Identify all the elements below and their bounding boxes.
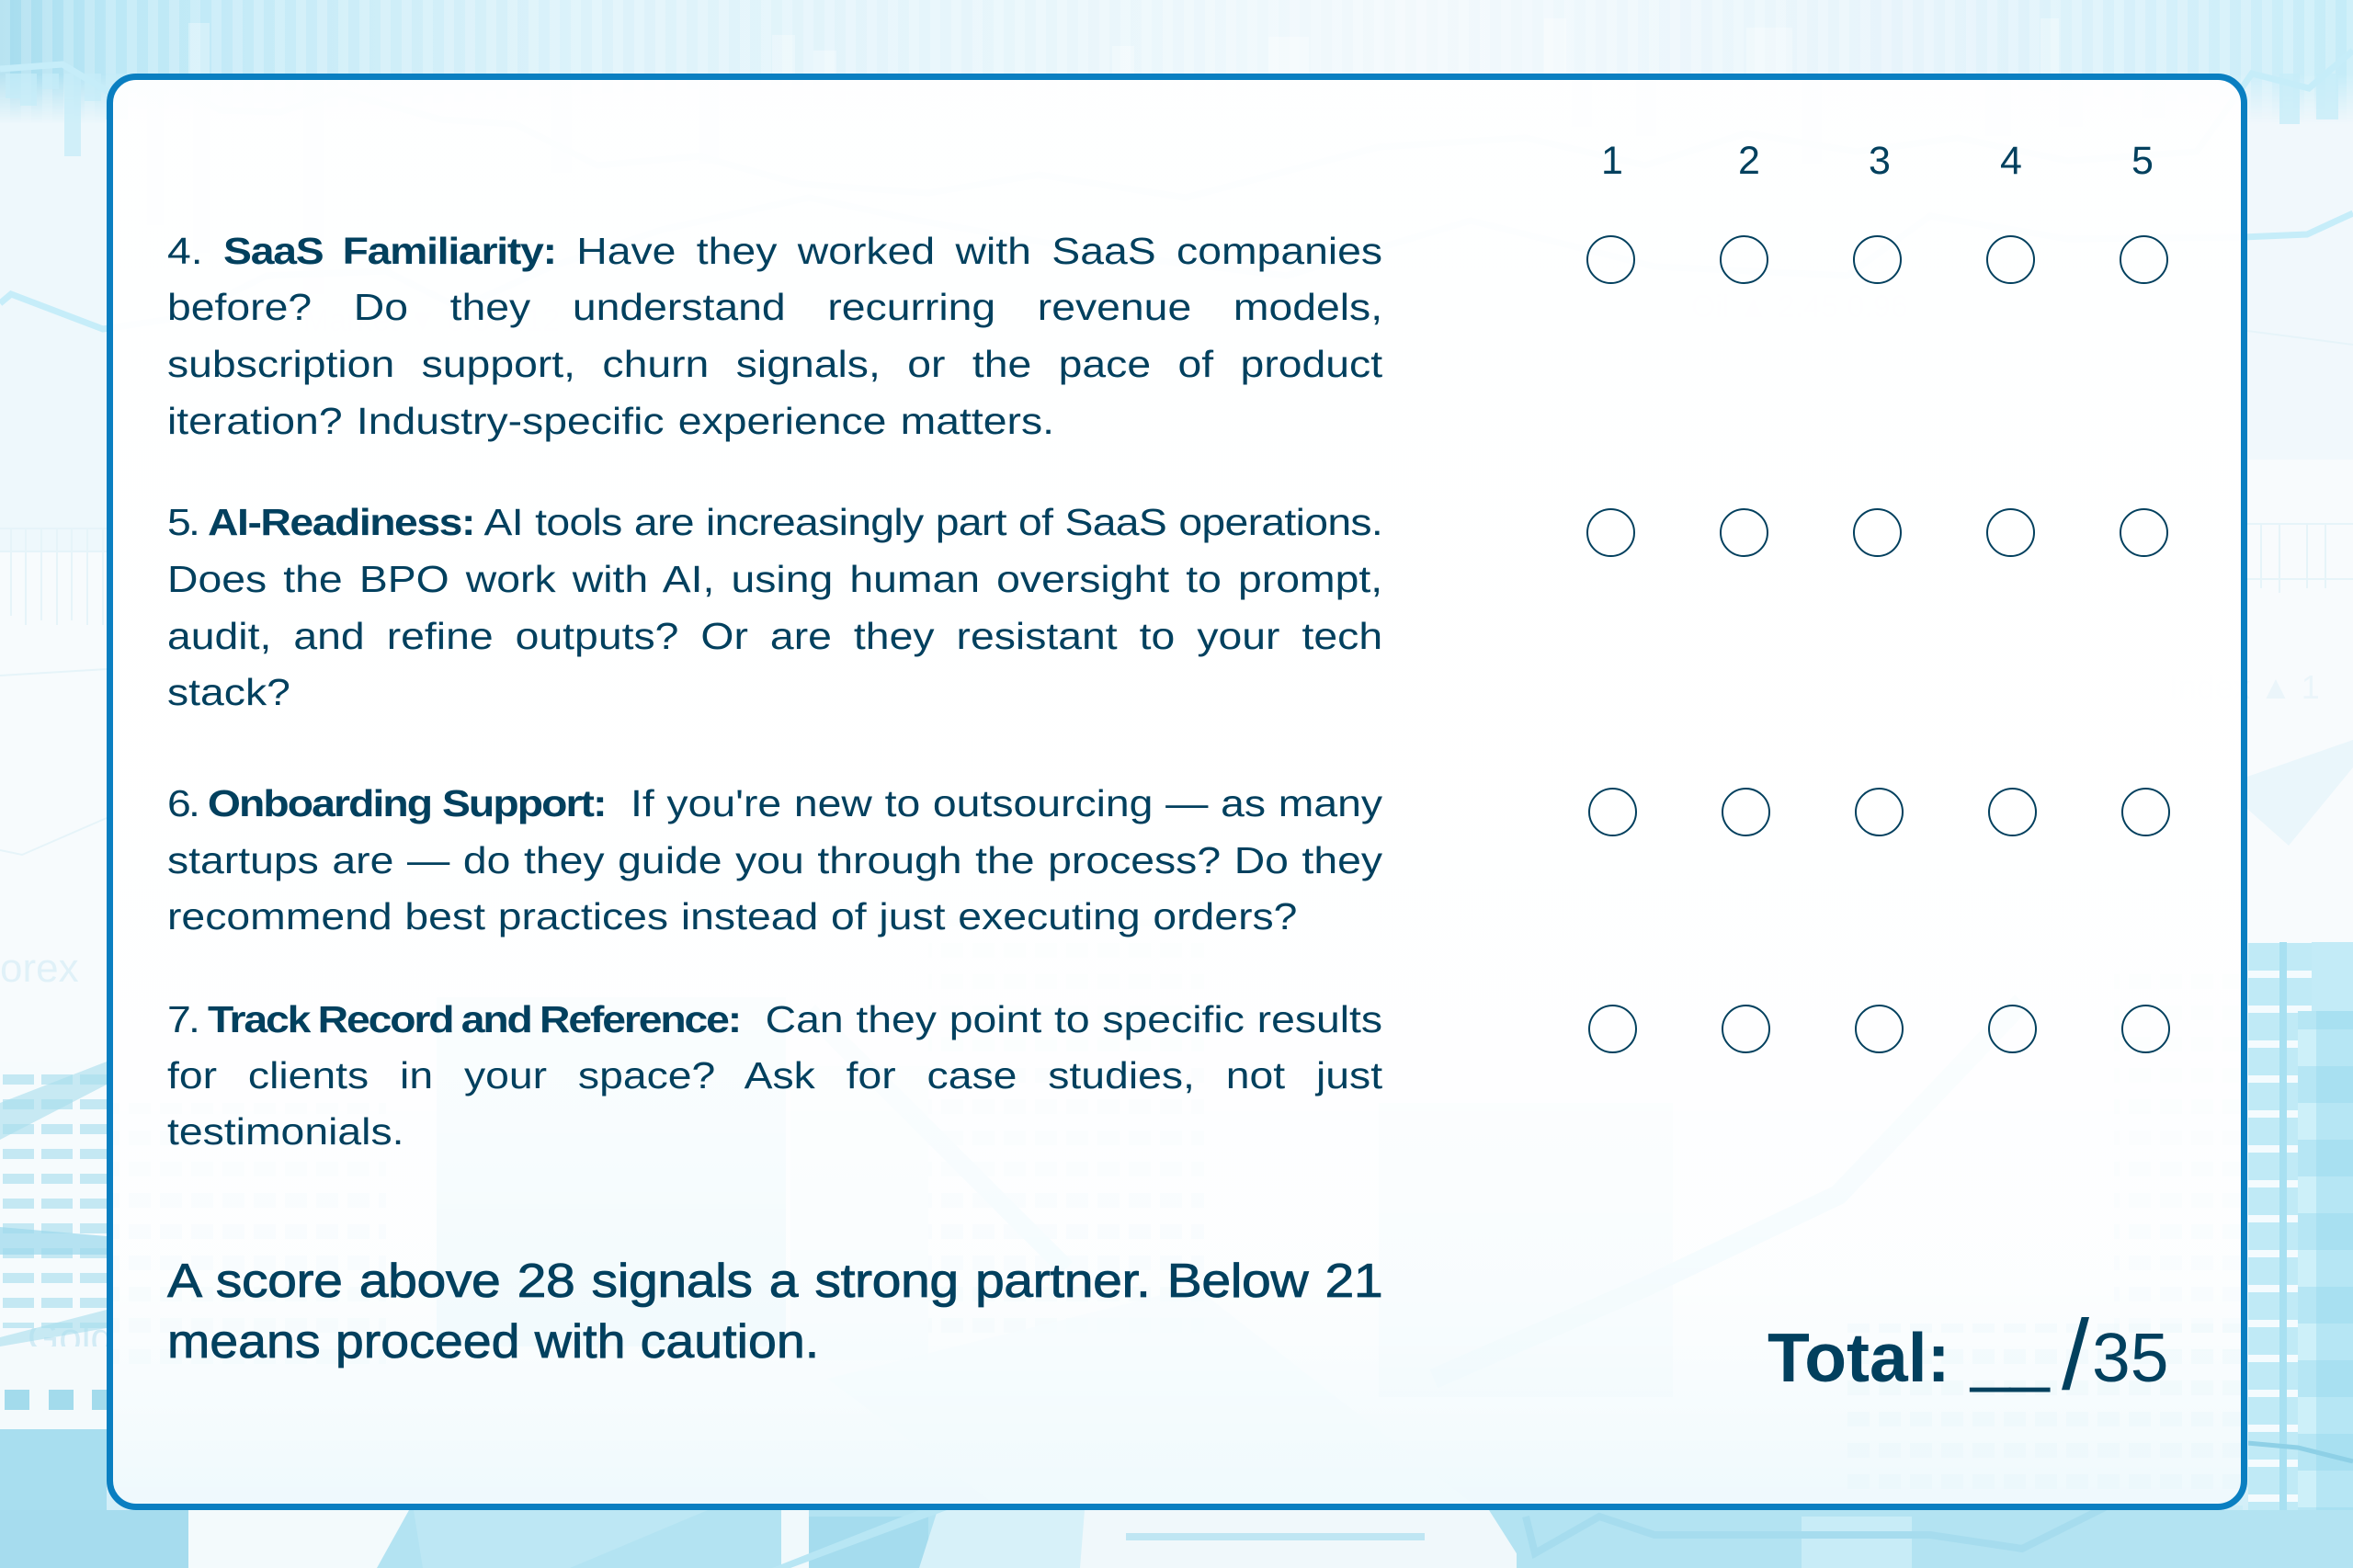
criterion 5: AI-Readiness: 5. AI-Readiness: AI tools are increasingly part of SaaS operations. — [167, 501, 1382, 543]
rating scale header numbers — [1601, 139, 2154, 183]
criterion 7: Track Record and Reference — [167, 998, 1382, 1153]
criterion 7: Track Record and Reference: for clients in your space? Ask for case studies, not just — [167, 1054, 1382, 1096]
criterion 4: SaaS Familiarity: 4. SaaS Familiarity: Have they worked with SaaS companies — [167, 230, 1382, 272]
total score: __ — [1971, 1314, 2050, 1393]
criterion 5: AI-Readiness: audit, and refine outputs? Or are they resistant to your tech — [167, 615, 1382, 657]
side tints — [0, 0, 2353, 1066]
faint market labels: Gold — [28, 1315, 113, 1360]
criterion 4: SaaS Familiarity — [167, 230, 1382, 442]
mid-right diagonal shard — [2247, 740, 2353, 846]
criterion 6: Onboarding Support: recommend best practices instead of just executing orders? — [167, 895, 1297, 937]
total score: Total: — [1768, 1319, 1950, 1396]
criterion 4: SaaS Familiarity: subscription support, churn signals, or the pace of product — [167, 343, 1382, 385]
criterion 5: AI-Readiness — [167, 501, 1382, 713]
criterion 6: Onboarding Support — [167, 782, 1382, 937]
right margin building — [2247, 942, 2353, 1568]
closing statement: score thresholds: means proceed with caution. — [167, 1315, 819, 1369]
closing statement: score thresholds: A score above 28 signals a strong partner. Below 21 — [167, 1255, 1382, 1308]
faint market labels: Market ▼ 0.5 0.12 — [303, 303, 560, 338]
total score: 35 — [2092, 1319, 2168, 1396]
number 4: 4 — [2000, 139, 2022, 183]
criterion 6: Onboarding Support: startups are — do they guide you through the process? Do they — [167, 839, 1382, 881]
faint market labels: Oil ▲ 2.45 0.96 — [1691, 290, 1908, 324]
line chart strokes — [0, 51, 2353, 329]
total score: / — [2062, 1299, 2089, 1410]
city skyline behind panel — [107, 919, 2248, 1568]
faint market labels: orex — [0, 946, 79, 991]
number 5: 5 — [2131, 139, 2154, 183]
rating circles: criterion 7 — [1588, 1005, 2170, 1053]
number 1: 1 — [1601, 139, 1623, 183]
faint chart grid at mid margins — [0, 331, 2353, 855]
criterion 6: Onboarding Support: 6. Onboarding Support: If you're new to outsourcing — as many — [167, 782, 1382, 824]
total score — [1768, 1299, 2168, 1410]
closing statement: score thresholds — [167, 1255, 1382, 1369]
criterion 4: SaaS Familiarity: iteration? Industry-specific experience matters. — [167, 400, 1054, 442]
rating circles: criterion 4 — [1586, 235, 2168, 284]
criterion 7: Track Record and Reference: testimonials. — [167, 1110, 404, 1153]
faint market labels: Index ▲ 1 — [2169, 668, 2320, 706]
criterion 5: AI-Readiness: stack? — [167, 671, 290, 713]
left margin tower stripes — [0, 1062, 110, 1568]
faint market labels — [0, 290, 2320, 1360]
rating circles: criterion 6 — [1588, 788, 2170, 836]
candlestick bars along top — [0, 0, 2353, 156]
number 2: 2 — [1738, 139, 1760, 183]
number 3: 3 — [1869, 139, 1891, 183]
criterion 7: Track Record and Reference: 7. Track Record and Reference: Can they point to specific results — [167, 998, 1382, 1040]
criterion 4: SaaS Familiarity: before? Do they understand recurring revenue models, — [167, 286, 1382, 328]
rating circles: criterion 5 — [1586, 508, 2168, 557]
bottom strip collage — [0, 1507, 2353, 1568]
criterion 5: AI-Readiness: Does the BPO work with AI, using human oversight to prompt, — [167, 558, 1382, 600]
